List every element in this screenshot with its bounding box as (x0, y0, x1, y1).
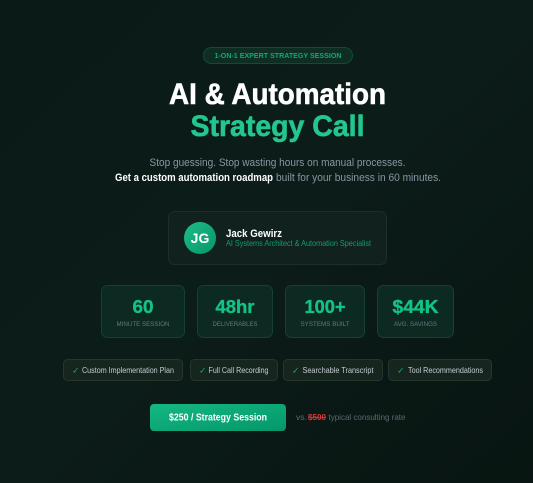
title: Strategy Call (190, 110, 364, 143)
icon: avatar initials: JG (191, 230, 209, 246)
price comparison: vs. (296, 412, 307, 422)
stat: 60 minute session: MINUTE SESSION (116, 321, 170, 328)
chip: searchable transcript: ✓ (292, 366, 300, 376)
presenter role: AI Systems Architect & Automation Specialist (226, 238, 372, 248)
panel: presenter profile (168, 212, 386, 264)
chip: custom implementation plan: Custom Implementation Plan (82, 365, 174, 375)
chip: tool recommendations (388, 360, 492, 380)
icon: avatar initials (184, 222, 216, 254)
stat: 48hr deliverables: DELIVERABLES (212, 321, 258, 328)
price comparison: typical consulting rate (328, 412, 406, 422)
stat: 60 minute session (102, 286, 184, 338)
chip: tool recommendations: ✓ (397, 366, 405, 376)
price comparison (296, 412, 406, 422)
button: price: $250 / Strategy Session (169, 412, 267, 424)
title: AI & Automation (169, 78, 386, 111)
chip: custom implementation plan (64, 360, 182, 380)
chip: full call recording: Full Call Recording (208, 365, 269, 375)
price comparison: $500 (308, 412, 326, 422)
subtitle: Stop guessing. Stop wasting hours on manual processes. (150, 157, 406, 169)
stat: 48hr deliverables (198, 286, 272, 338)
chip: custom implementation plan: ✓ (72, 366, 80, 376)
presenter name: Jack Gewirz (226, 228, 282, 240)
stat: $44K avg. savings (378, 286, 454, 338)
button: price (150, 404, 286, 431)
stat: 60 minute session: 60 (132, 297, 154, 317)
subtitle: Get a custom automation roadmap (115, 172, 273, 184)
stat: 48hr deliverables: 48hr (216, 297, 254, 317)
subtitle (115, 157, 441, 184)
chip: tool recommendations: Tool Recommendations (408, 365, 483, 375)
stat: $44K avg. savings: $44K (392, 297, 439, 317)
title (169, 78, 386, 143)
stat: 100+ systems built: SYSTEMS BUILT (300, 321, 350, 328)
stat: 100+ systems built: 100+ (304, 297, 346, 317)
stat: 100+ systems built (286, 286, 364, 338)
chip: searchable transcript (284, 360, 382, 380)
chip: searchable transcript: Searchable Transcript (302, 365, 374, 375)
chip: full call recording (190, 360, 278, 380)
subtitle: built for your business in 60 minutes. (276, 172, 441, 184)
badge: 1-on-1 expert strategy session (204, 48, 352, 64)
stat: $44K avg. savings: AVG. SAVINGS (394, 321, 437, 328)
chip: full call recording: ✓ (199, 366, 207, 376)
badge: 1-on-1 expert strategy session: 1-ON-1 EXPERT STRATEGY SESSION (214, 51, 342, 60)
